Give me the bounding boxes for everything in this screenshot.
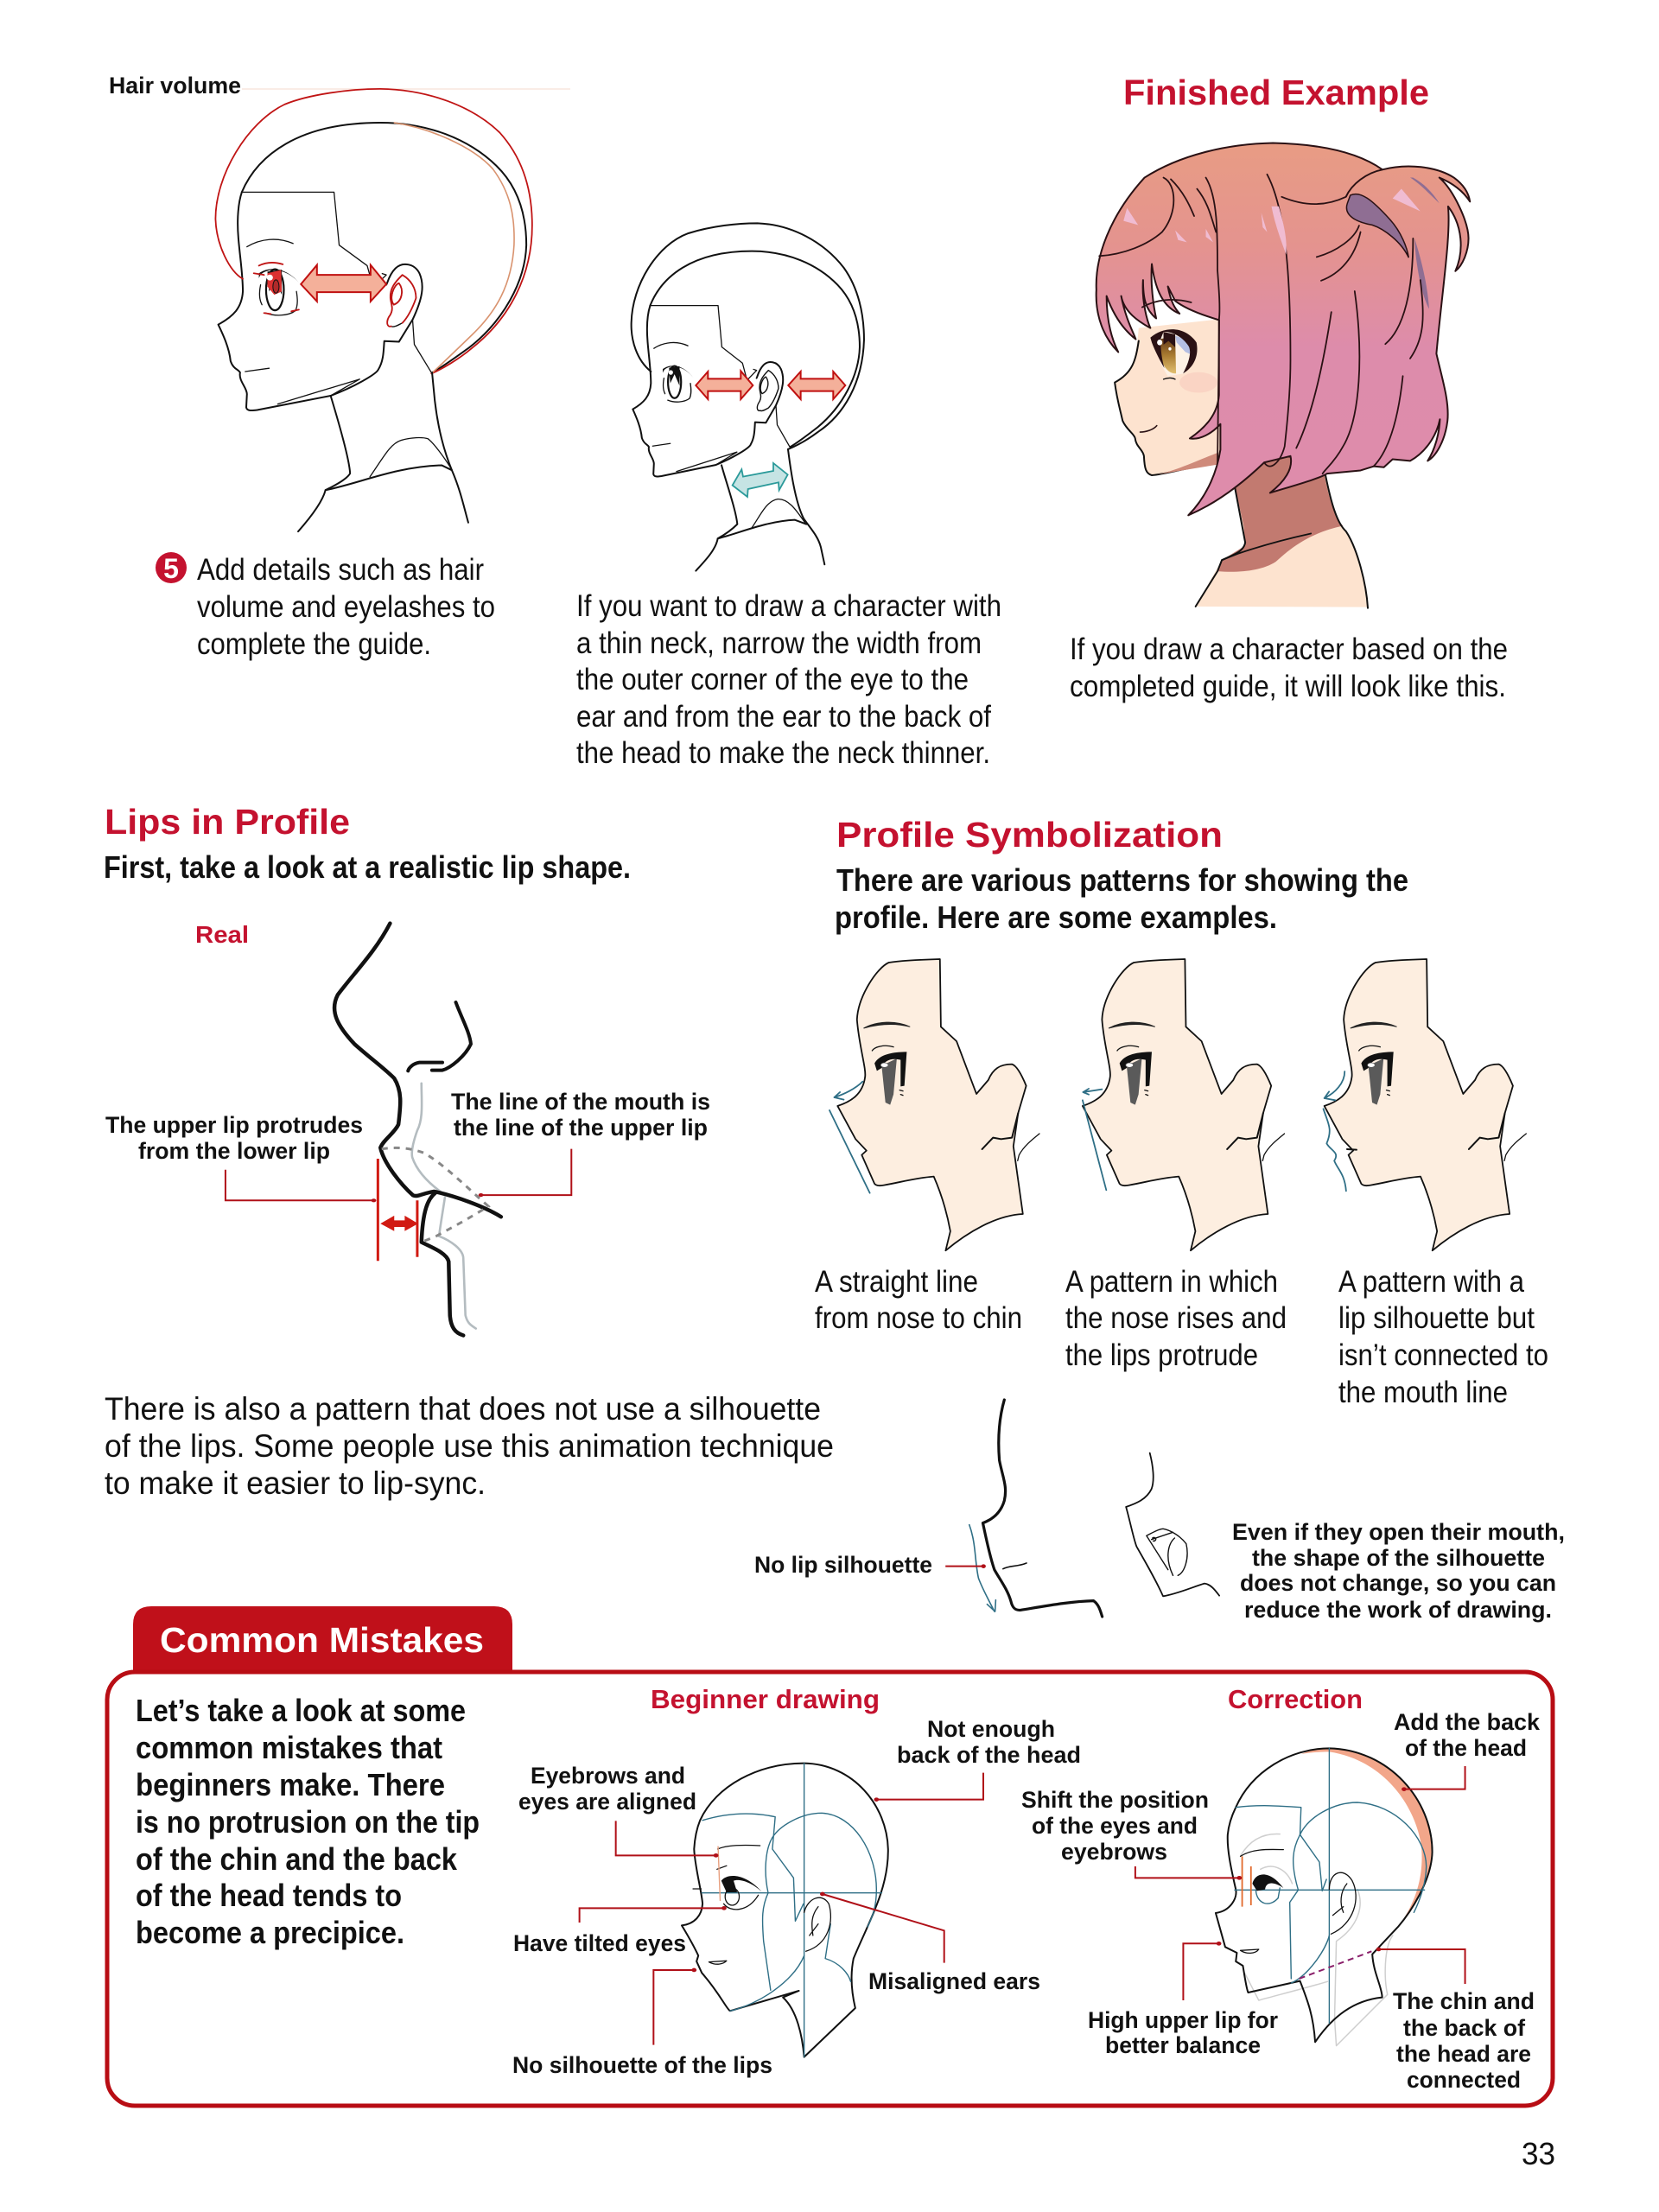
caption: straight line: from nose to chin xyxy=(815,1301,1022,1335)
labels: corrections: the back of xyxy=(1403,2015,1526,2041)
panel: thin neck variation xyxy=(576,223,1001,770)
drawing: no lip silhouette profiles xyxy=(945,1400,1219,1617)
text: thin neck caption xyxy=(576,589,1001,770)
labels: corrections: the head are xyxy=(1396,2041,1531,2067)
text: step 5 caption: volume and eyelashes to xyxy=(197,590,495,624)
text: silhouette explanation: does not change, so you can xyxy=(1240,1570,1556,1596)
panel: lips in profile xyxy=(104,802,710,1335)
text: common mistakes intro: Let’s take a look at some xyxy=(136,1693,466,1728)
labels: corrections: better balance xyxy=(1105,2032,1261,2058)
tab: common mistakes xyxy=(133,1606,512,1673)
label: upper lip protrudes: from the lower lip xyxy=(138,1138,330,1164)
text: step 5 caption: complete the guide. xyxy=(197,627,431,661)
text: thin neck caption: ear and from the ear to the back of xyxy=(576,700,991,734)
text: finished example caption: completed guide, it will look like this. xyxy=(1070,670,1506,703)
text: silhouette explanation: Even if they open their mouth, xyxy=(1232,1519,1565,1545)
caption: nose rises: A pattern in which xyxy=(1065,1265,1278,1299)
panel: profile symbolization xyxy=(815,815,1548,1409)
labels: beginner mistakes: No silhouette of the lips xyxy=(512,2052,772,2078)
heading: lips in profile: Lips in Profile xyxy=(105,802,350,842)
labels: beginner mistakes: back of the head xyxy=(897,1742,1081,1768)
text: silhouette explanation xyxy=(1232,1519,1565,1623)
text: thin neck caption: the head to make the neck thinner. xyxy=(576,736,990,770)
labels: corrections: eyebrows xyxy=(1061,1839,1167,1865)
panel: common mistakes xyxy=(107,1606,1553,2106)
illustration: finished character xyxy=(1096,143,1470,608)
labels: beginner mistakes xyxy=(512,1716,1081,2078)
drawing: head with hair volume xyxy=(215,89,532,531)
labels: corrections: Shift the position xyxy=(1021,1787,1209,1813)
subheading: patterns intro: profile. Here are some examples. xyxy=(835,899,1277,935)
caption: lip silhouette: isn’t connected to xyxy=(1338,1338,1548,1372)
labels: corrections: of the head xyxy=(1405,1735,1527,1761)
drawing: straight line profile xyxy=(830,959,1039,1250)
labels: corrections: connected xyxy=(1407,2067,1521,2093)
text: common mistakes intro: become a precipice. xyxy=(136,1915,404,1950)
tab: common mistakes: Common Mistakes xyxy=(160,1620,484,1660)
text: thin neck caption: the outer corner of the eye to the xyxy=(576,663,969,696)
panel: no lip silhouette xyxy=(105,1391,1565,1623)
labels: corrections: Add the back xyxy=(1394,1709,1541,1735)
drawing: corrected head xyxy=(1135,1748,1465,2046)
panel: finished example xyxy=(1070,73,1508,703)
label: no lip silhouette: No lip silhouette xyxy=(754,1552,932,1578)
label: real: Real xyxy=(195,921,249,948)
caption: nose rises xyxy=(1065,1265,1287,1372)
text: animation technique: of the lips. Some people use this animation technique xyxy=(105,1428,834,1464)
text: common mistakes intro: of the chin and the back xyxy=(136,1841,458,1877)
drawing: head with thin neck arrows xyxy=(632,223,864,571)
text: common mistakes intro: beginners make. There xyxy=(136,1767,445,1802)
labels: beginner mistakes: Misaligned ears xyxy=(868,1968,1040,1994)
labels: corrections: The chin and xyxy=(1393,1988,1535,2014)
heading: finished example: Finished Example xyxy=(1123,73,1429,112)
caption: lip silhouette: the mouth line xyxy=(1338,1376,1508,1409)
subheading: patterns intro: There are various patterns for showing the xyxy=(836,862,1408,898)
text: step 5 caption: Add details such as hair xyxy=(197,553,484,587)
caption: nose rises: the nose rises and xyxy=(1065,1301,1287,1335)
labels: beginner mistakes: eyes are aligned xyxy=(518,1789,696,1815)
drawing: nose rises profile xyxy=(1083,959,1285,1250)
label: line of the mouth: the line of the upper lip xyxy=(454,1115,708,1141)
diagram: realistic lip profile xyxy=(226,924,571,1335)
text: finished example caption: If you draw a character based on the xyxy=(1070,632,1508,666)
text: animation technique: to make it easier to lip-sync. xyxy=(105,1465,486,1501)
text: silhouette explanation: the shape of the silhouette xyxy=(1252,1545,1545,1571)
text: thin neck caption: If you want to draw a character with xyxy=(576,589,1001,623)
caption: nose rises: the lips protrude xyxy=(1065,1338,1258,1372)
frame xyxy=(107,1672,1553,2106)
heading: correction: Correction xyxy=(1228,1684,1363,1714)
labels: corrections: of the eyes and xyxy=(1032,1813,1198,1839)
text: common mistakes intro xyxy=(136,1693,480,1950)
subheading: realistic lip shape: First, take a look at a realistic lip shape. xyxy=(104,849,631,885)
text: common mistakes intro: common mistakes that xyxy=(136,1730,442,1765)
labels: corrections xyxy=(1021,1709,1541,2093)
label: line of the mouth: The line of the mouth is xyxy=(451,1089,710,1115)
caption: straight line xyxy=(815,1265,1022,1335)
heading: beginner drawing: Beginner drawing xyxy=(651,1684,880,1714)
labels: beginner mistakes: Eyebrows and xyxy=(531,1763,685,1789)
labels: corrections: High upper lip for xyxy=(1088,2007,1278,2033)
text: animation technique xyxy=(105,1391,834,1501)
subheading: patterns intro xyxy=(835,862,1408,935)
step number badge: 5 xyxy=(163,553,179,584)
step number badge xyxy=(156,552,187,584)
text: common mistakes intro: is no protrusion on the tip xyxy=(136,1804,480,1840)
caption: straight line: A straight line xyxy=(815,1265,978,1299)
caption: lip silhouette: A pattern with a xyxy=(1338,1265,1524,1299)
label: upper lip protrudes: The upper lip protrudes xyxy=(105,1112,363,1138)
text: common mistakes intro: of the head tends to xyxy=(136,1878,402,1913)
heading: profile symbolization: Profile Symbolization xyxy=(836,815,1223,855)
text: step 5 caption xyxy=(197,553,495,661)
caption: lip silhouette: lip silhouette but xyxy=(1338,1301,1535,1335)
drawing: lip silhouette profile xyxy=(1324,959,1526,1250)
labels: beginner mistakes: Not enough xyxy=(927,1716,1055,1742)
caption: lip silhouette xyxy=(1338,1265,1548,1409)
label: hair volume: Hair volume xyxy=(109,73,241,99)
text: silhouette explanation: reduce the work of drawing. xyxy=(1244,1597,1552,1623)
text: thin neck caption: a thin neck, narrow the width from xyxy=(576,626,982,660)
labels: beginner mistakes: Have tilted eyes xyxy=(513,1930,686,1956)
text: finished example caption xyxy=(1070,632,1508,703)
page number: 33 xyxy=(1522,2136,1555,2171)
drawing: beginner head xyxy=(580,1764,983,2057)
text: animation technique: There is also a pattern that does not use a silhouette xyxy=(105,1391,821,1427)
panel: hair volume step xyxy=(109,73,570,661)
label: upper lip protrudes xyxy=(105,1112,363,1164)
label: line of the mouth xyxy=(451,1089,710,1141)
